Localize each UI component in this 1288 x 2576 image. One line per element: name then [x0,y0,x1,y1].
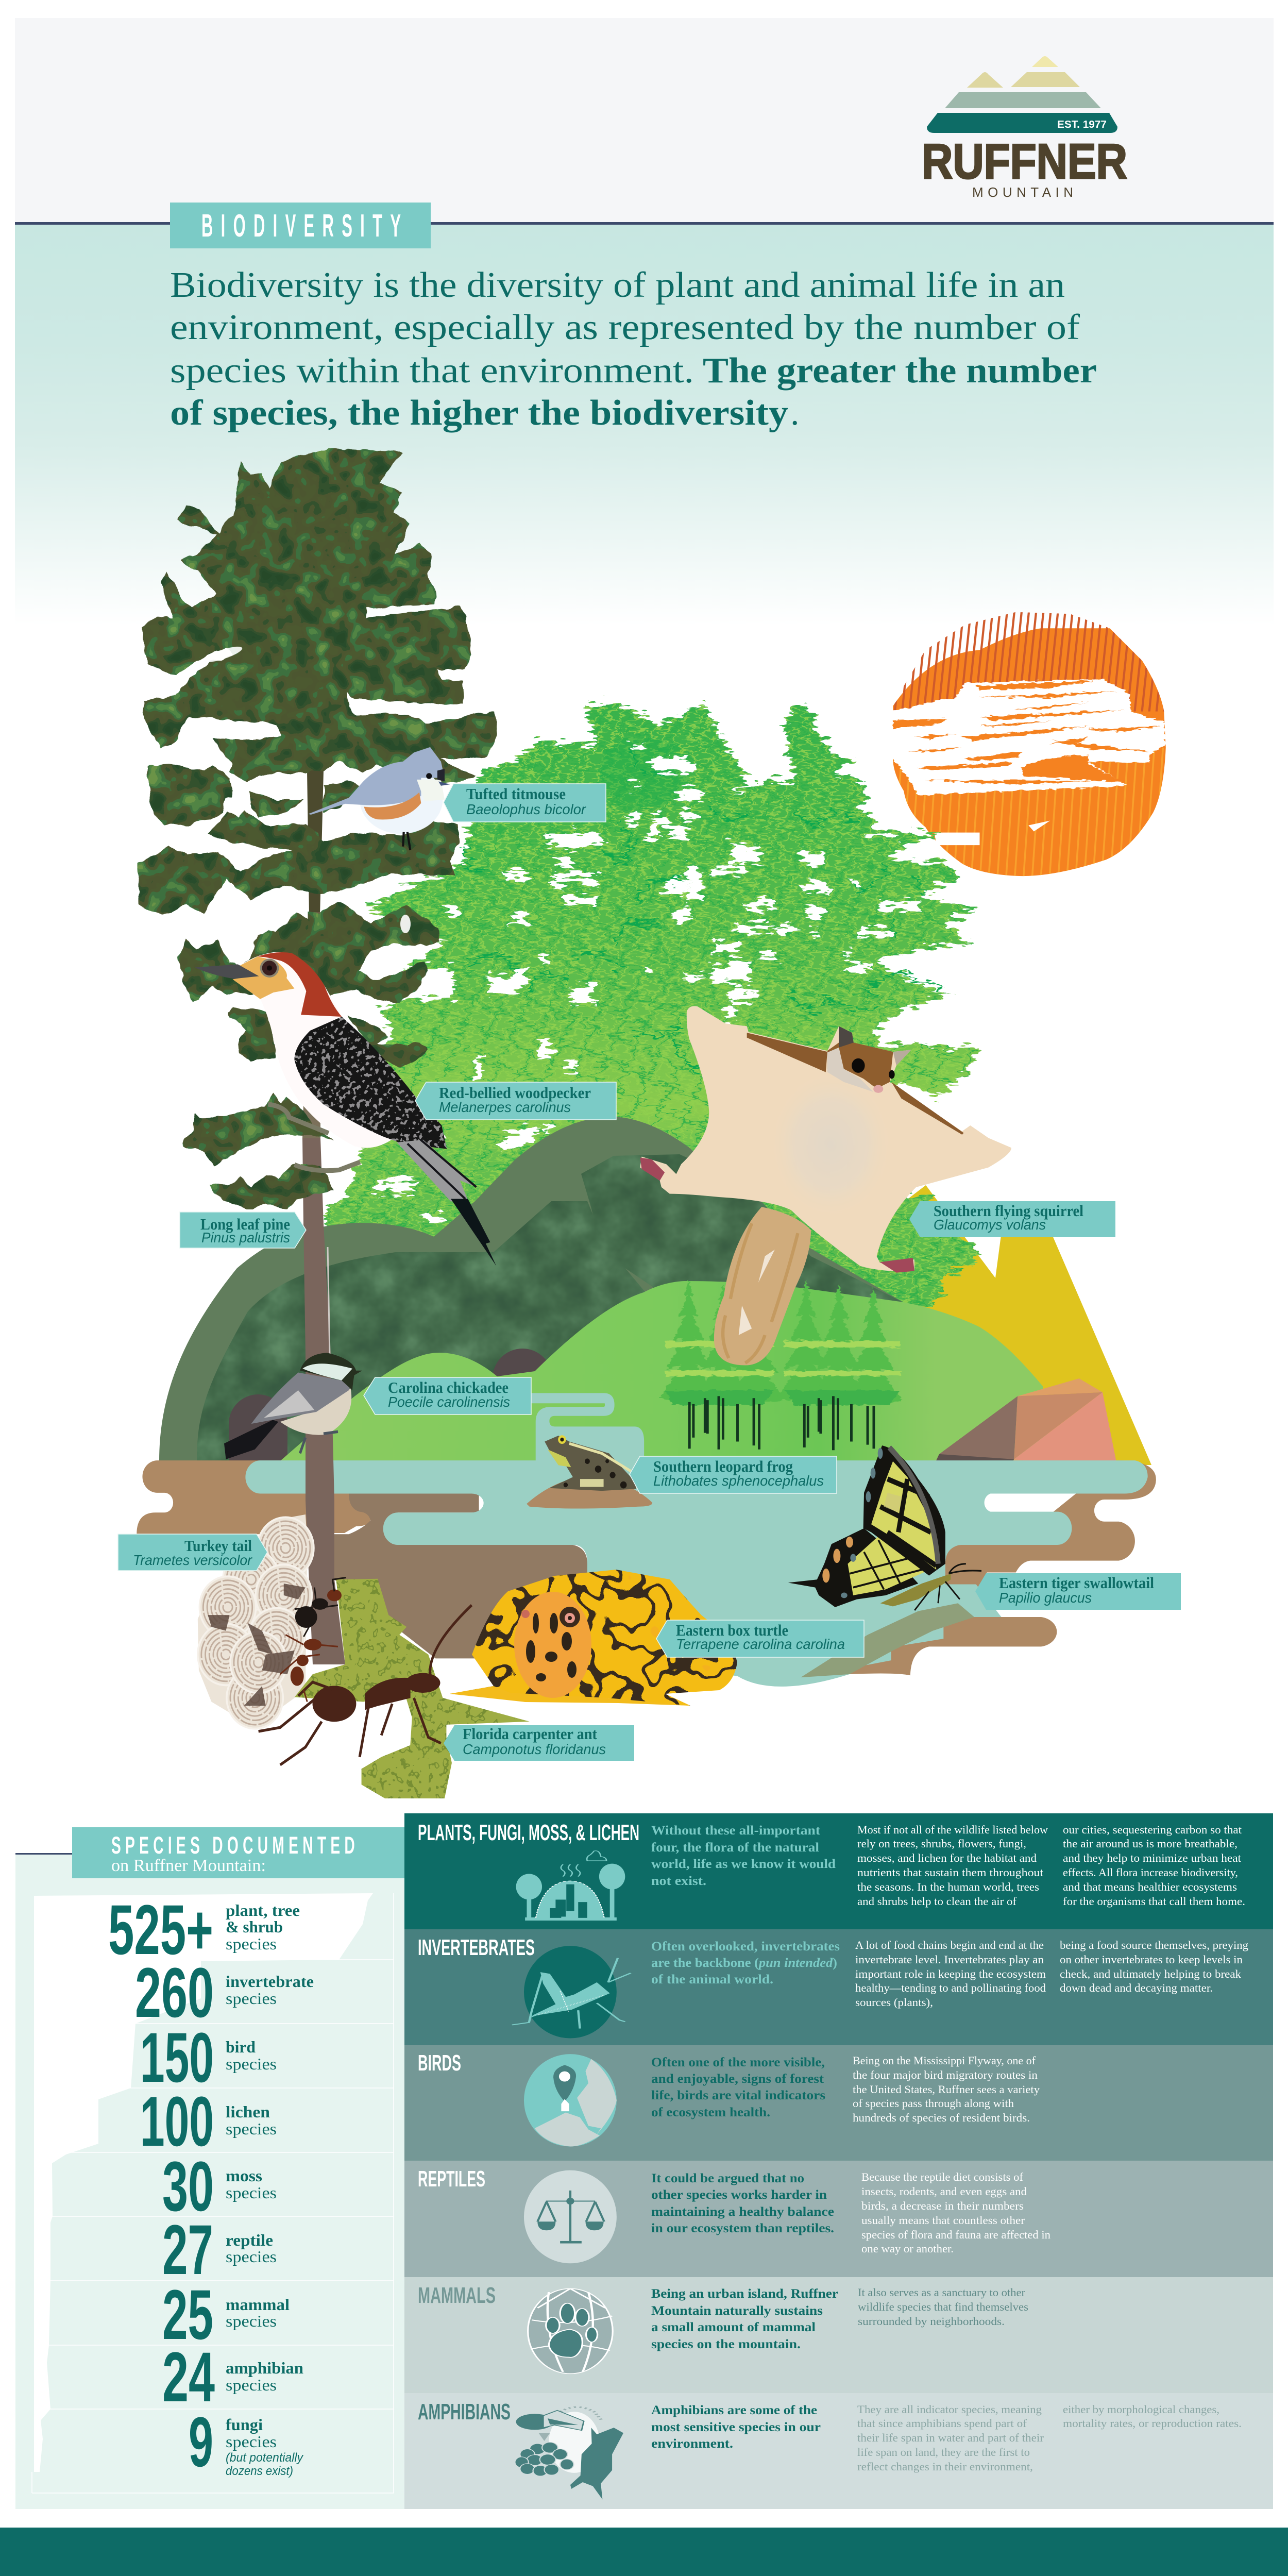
body text: invertebrate level. Invertebrates play an [855,1953,1044,1966]
sky gradient panel [15,223,1274,625]
stat: mammals: species [226,2312,277,2330]
panel heading: SPECIES DOCUMENTED [111,1832,355,1859]
hindwing [788,1528,918,1607]
butterfly body [880,1574,951,1606]
illustration: turkey tail fungus [198,1514,314,1729]
body text: sources (plants), [855,1996,933,2009]
intro statement [651,2171,834,2235]
body text: It also serves as a sanctuary to other [858,2286,1026,2299]
stat: fungi: (but potentially [226,2451,304,2465]
turtle foot [450,1686,690,1706]
intro text: Biodiversity is the diversity of plant and animal life in an [170,265,1065,305]
label: Carolina chickadee [364,1377,531,1415]
heading: MAMMALS [418,2283,496,2308]
stat: invertebrates: invertebrate [226,1972,314,1991]
label: Long leaf pine [180,1212,306,1248]
body text: and they help to minimize urban heat [1063,1851,1241,1864]
intro statement: four, the flora of the natural [651,1841,819,1855]
stat: plants: & shrub [226,1917,283,1936]
label: Long leaf pine: Pinus palustris [201,1230,290,1245]
body text: effects. All flora increase biodiversity, [1063,1866,1238,1879]
body text: for the organisms that call them home. [1063,1895,1245,1908]
forewing [863,1445,945,1576]
illustration: stream and pond left [245,1393,670,1579]
woodpecker wing [294,1017,447,1149]
squirrel belly shading [768,1069,893,1220]
intro statement: world, life as we know it would [651,1857,836,1871]
squirrel feet [640,1157,914,1273]
heading: REPTILES [418,2166,485,2192]
band: plants, fungi, moss and lichen [404,1813,1273,1929]
woodpecker face [233,956,294,999]
body text: hundreds of species of resident birds. [853,2111,1030,2124]
intro text [170,265,1097,433]
body text: of species pass through along with [853,2097,1014,2110]
table frame and rows [32,1893,394,2493]
woodpecker feet [268,1104,360,1171]
heading: AMPHIBIANS [418,2399,511,2425]
label: Tufted titmouse [444,784,606,822]
stat: lichen: 100 [140,2082,214,2161]
illustration: sun [890,612,1166,876]
label: Turkey tail: Turkey tail [184,1537,252,1555]
stat: amphibians [162,2338,303,2417]
body text [857,1823,1245,1908]
panel background [15,1854,405,2509]
label: Long leaf pine: Long leaf pine [200,1215,290,1233]
body text [861,2170,1050,2255]
label: Eastern box turtle: Terrapene carolina carolina [676,1636,845,1652]
illustration: carpenter ants [259,1577,472,1765]
label: Eastern tiger swallowtail [975,1573,1181,1610]
intro text: environment, especially as represented by the number of [170,308,1080,347]
intro statement: Being an urban island, Ruffner [651,2287,838,2301]
band: reptiles [404,2161,1273,2277]
body text: surrounded by neighborhoods. [858,2315,1005,2328]
label: Eastern tiger swallowtail: Papilio glaucus [999,1590,1092,1606]
logo est. date: EST. 1977 [1057,119,1107,130]
body text: Being on the Mississippi Flyway, one of [853,2054,1036,2067]
label: Turkey tail: Trametes versicolor [133,1552,253,1568]
stat: reptiles [162,2211,277,2289]
panel heading: on Ruffner Mountain: [111,1856,266,1875]
intro statement: other species works harder in [651,2188,827,2202]
stat: moss [162,2147,277,2226]
adult frog [570,2428,623,2499]
illustration: frog island [527,1476,652,1509]
illustration: moss [295,1579,530,1798]
intro statement: Often overlooked, invertebrates [651,1940,840,1954]
turtle head [514,1592,591,1698]
illustration: gaps in canopy [201,644,411,933]
eggs [515,2443,573,2476]
body text [853,2054,1040,2124]
big ant [259,1605,472,1765]
stat: reptiles: species [226,2247,277,2266]
illustration: rock [934,1378,1119,1485]
stat: plants: species [226,1934,277,1953]
header panel [15,18,1274,223]
intro statement: maintaining a healthy balance [651,2205,834,2219]
illustration: red-bellied woodpecker [195,952,496,1266]
heading: INVERTEBRATES [418,1935,535,1960]
illustration: soil right [850,1460,1156,1675]
label: Tufted titmouse: Baeolophus bicolor [466,801,587,817]
illustration: dark green hill band [159,1117,903,1461]
stat: invertebrates: 260 [135,1954,214,2032]
stat: moss: species [226,2183,277,2202]
stat: amphibians: amphibian [226,2359,303,2377]
body text: healthy—tending to and pollinating food [855,1981,1046,1994]
intro statement: not exist. [651,1874,706,1888]
body text [857,2403,1242,2473]
illustration: tufted titmouse [308,747,450,850]
footer bar [0,2528,1288,2576]
section label: Biodiversity: BIODIVERSITY [201,209,401,244]
body text [858,2286,1028,2328]
intro statement [651,2056,825,2119]
intro statement: life, birds are vital indicators [651,2089,825,2102]
stepped white mountain shape [34,1893,373,2472]
panel heading [72,1827,405,1878]
woodpecker tail [397,1140,476,1202]
body text: being a food source themselves, preying [1060,1939,1248,1951]
illustration: yellow mountains [845,1185,1151,1465]
stat: fungi: species [226,2432,277,2451]
woodpecker body [239,952,447,1148]
body text: one way or another. [861,2242,954,2255]
intro statement [651,1824,836,1888]
panel: species documented [15,1827,405,2509]
body text: check, and ultimately helping to break [1060,1967,1241,1980]
logo subtitle: MOUNTAIN [972,184,1073,200]
illustration: long leaf pine trunk [302,770,345,1664]
label: Eastern box turtle: Eastern box turtle [676,1621,788,1639]
body text: on other invertebrates to keep levels in [1060,1953,1243,1966]
stat: fungi: dozens exist) [226,2464,293,2478]
stat: plants: plant, tree [226,1901,300,1920]
body text: birds, a decrease in their numbers [861,2199,1024,2212]
band: invertebrates [404,1929,1273,2045]
intro statement: are the backbone ( pun intended ) [651,1956,837,1970]
stat: fungi: fungi [226,2415,263,2434]
body text: A lot of food chains begin and end at the [855,1939,1044,1951]
label: Florida carpenter ant: Camponotus floridanus [463,1741,606,1757]
intro text: of species, the higher the biodiversity [170,393,788,433]
body text: and shrubs help to clean the air of [857,1895,1017,1908]
intro statement: Often one of the more visible, [651,2056,825,2069]
stat: moss: 30 [162,2147,214,2226]
stat: birds: species [226,2055,277,2073]
stat: lichen: species [226,2119,277,2138]
label: Eastern box turtle [656,1620,864,1657]
squirrel tail [714,1207,811,1366]
woodpecker red cap [258,952,342,1017]
icon: city among trees [516,1851,625,1921]
stat: mammals: 25 [162,2276,213,2354]
body text: our cities, sequestering carbon so that [1063,1823,1242,1836]
woodpecker eye [260,958,279,978]
label: Southern flying squirrel: Southern flying squirrel [934,1202,1083,1220]
label: Red-bellied woodpecker [415,1082,616,1120]
icon: balance scale [524,2170,617,2263]
icon: grasshopper [512,1946,631,2038]
squirrel membrane [640,1006,1011,1271]
label: Southern leopard frog: Lithobates sphenocephalus [653,1473,824,1489]
body text: mortality rates, or reproduction rates. [1063,2417,1242,2430]
tadpole [516,2411,584,2430]
label: Southern leopard frog: Southern leopard frog [653,1457,793,1475]
illustration: eastern box turtle [450,1570,737,1706]
stat: amphibians: 24 [162,2338,215,2417]
intro statement: of the animal world. [651,1973,773,1986]
squirrel head [827,1026,911,1093]
body text: either by morphological changes, [1063,2403,1219,2416]
label: Turkey tail [118,1534,267,1571]
illustration: carolina chickadee [224,1353,362,1459]
body text [855,1939,1248,2009]
icon: flyway map pin [524,2054,617,2147]
logo wordmark: RUFFNER [922,134,1127,189]
body text: reflect changes in their environment, [857,2460,1033,2473]
label: Florida carpenter ant [444,1725,634,1761]
body text: that since amphibians spend part of [857,2417,1027,2430]
stat: reptiles: 27 [162,2211,213,2289]
body text: wildlife species that find themselves [858,2300,1028,2313]
stat: fungi: 9 [189,2403,213,2482]
body text: usually means that countless other [861,2214,1025,2227]
label: Florida carpenter ant: Florida carpenter ant [463,1725,598,1743]
body text: Because the reptile diet consists of [861,2170,1024,2183]
intro statement: Amphibians are some of the [651,2403,817,2417]
intro statement: of ecosystem health. [651,2106,770,2119]
body text: the four major bird migratory routes in [853,2068,1038,2081]
heading: PLANTS, FUNGI, MOSS, & LICHEN [418,1820,639,1845]
intro statement: in our ecosystem than reptiles. [651,2221,834,2235]
stat: plants: 525+ [108,1891,213,1969]
logo mountain mark [927,56,1117,133]
label: Red-bellied woodpecker: Melanerpes carolinus [439,1099,571,1115]
intro statement [651,2287,838,2351]
illustration: bright green hills [280,1281,1051,1461]
label: Eastern tiger swallowtail: Eastern tiger swallowtail [999,1574,1154,1592]
stat: amphibians: species [226,2376,277,2394]
band: amphibians [404,2393,1273,2509]
section label: Biodiversity [170,203,431,248]
body text: the seasons. In the human world, trees [857,1880,1039,1893]
intro text: species within that environment. [170,351,694,391]
logo: Ruffner Mountain [922,56,1127,200]
illustration: tiger swallowtail butterfly [788,1445,981,1610]
illustration: soil left [137,1460,587,1658]
intro statement [651,2403,821,2451]
illustration: pond right [618,1460,1148,1687]
illustration: mottled forest hills [197,1154,903,1461]
label: Carolina chickadee: Carolina chickadee [388,1378,509,1396]
label: Tufted titmouse: Tufted titmouse [466,785,566,803]
stat: invertebrates: species [226,1989,277,2008]
heading: BIRDS [418,2050,461,2076]
body text: and that means healthier ecosystems [1063,1880,1237,1893]
small red ant [280,1635,338,1702]
body text: Most if not all of the wildlife listed below [857,1823,1048,1836]
stat: reptiles: reptile [226,2231,273,2249]
body text: They are all indicator species, meaning [857,2403,1042,2416]
illustration: long leaf pine canopy [138,448,498,1209]
stat: mammals [162,2276,290,2354]
label: Southern flying squirrel [909,1201,1115,1237]
body text: the United States, Ruffner sees a variety [853,2083,1040,2096]
body text: rely on trees, shrubs, flowers, fungi, [857,1837,1026,1850]
small black ant [295,1577,346,1637]
stat: invertebrates [135,1954,314,2032]
intro statement: and enjoyable, signs of forest [651,2072,824,2086]
icon: paw print [528,2288,613,2373]
label: Southern leopard frog [630,1456,837,1493]
body text: their life span in water and part of their [857,2431,1044,2444]
body text: species of flora and fauna are affected in [861,2228,1050,2241]
woodpecker beak [195,964,259,979]
body text: nutrients that sustain them throughout [857,1866,1043,1879]
body text: mosses, and lichen for the habitat and [857,1851,1037,1864]
icon: frog life cycle [515,2407,623,2499]
label: Southern flying squirrel: Glaucomys volans [934,1217,1046,1233]
header rule [15,222,1274,225]
stat: mammals: mammal [226,2295,290,2314]
band: birds [404,2045,1273,2161]
intro text: . [790,393,800,433]
stat: lichen: lichen [226,2102,270,2121]
intro statement: Mountain naturally sustains [651,2304,823,2318]
body text: down dead and decaying matter. [1060,1981,1213,1994]
intro statement: It could be argued that no [651,2171,804,2185]
label: Carolina chickadee: Poecile carolinensis [388,1394,510,1410]
illustration: southern leopard frog [545,1435,636,1491]
stat: birds: bird [226,2038,256,2056]
illustration: mossy branch [801,1603,974,1677]
band: mammals [404,2277,1273,2393]
intro statement [651,1940,840,1986]
illustration: background conifers [324,703,979,1319]
body text: insects, rodents, and even eggs and [861,2185,1027,2198]
panel top rule [15,1853,72,1855]
intro text: The greater the number [703,351,1097,391]
illustration: distant small trees [660,1280,902,1450]
stat: birds: 150 [140,2018,214,2097]
stat: moss: moss [226,2166,262,2185]
body text: life span on land, they are the first to [857,2446,1030,2459]
intro statement: species on the mountain. [651,2337,801,2351]
intro statement: a small amount of mammal [651,2320,816,2334]
intro statement: environment. [651,2437,733,2451]
intro statement: most sensitive species in our [651,2420,821,2434]
illustration: dark boulders [229,1349,552,1461]
body text: the air around us is more breathable, [1063,1837,1238,1850]
intro statement: Without these all-important [651,1824,821,1838]
stat: fungi [189,2403,304,2482]
squirrel back fur [747,1033,827,1072]
body text: important role in keeping the ecosystem [855,1967,1046,1980]
label: Red-bellied woodpecker: Red-bellied woodpecker [439,1084,591,1102]
illustration: southern flying squirrel [640,1006,1011,1366]
